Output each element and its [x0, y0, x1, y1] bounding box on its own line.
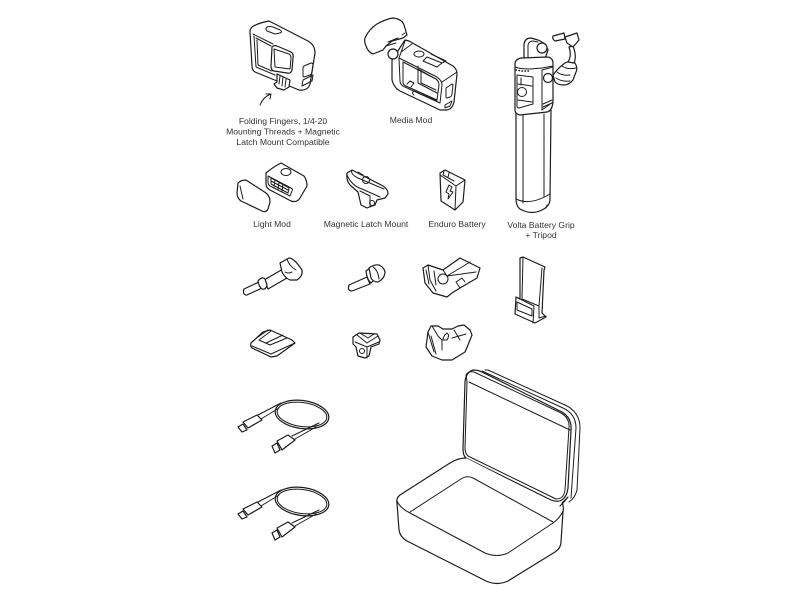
icon: open carrying case	[397, 370, 580, 584]
arrow: points to folding fingers	[260, 94, 271, 105]
label: camera features: Folding Fingers, 1/4-20	[239, 116, 327, 126]
label: camera features: Latch Mount Compatible	[236, 137, 330, 147]
label: magnetic latch mount: Magnetic Latch Mount	[324, 219, 409, 229]
icon: media mod	[365, 18, 457, 110]
icon: swivel buckle	[426, 325, 472, 360]
label: media mod: Media Mod	[390, 115, 432, 125]
icon: adhesive mount	[251, 330, 295, 357]
label: volta battery grip: + Tripod	[525, 230, 557, 240]
icon: usb-c cable 2	[238, 484, 331, 540]
icon: camera	[250, 21, 315, 90]
icon: short thumbscrew	[348, 265, 385, 291]
icon: quick release buckle	[353, 333, 380, 358]
label: camera features	[226, 116, 341, 147]
icon: buckle mount	[423, 258, 480, 297]
label: light mod: Light Mod	[253, 219, 291, 229]
label: volta battery grip: Volta Battery Grip	[507, 220, 575, 230]
icon: long thumbscrew	[243, 258, 302, 295]
icon: volta battery grip	[515, 33, 579, 212]
label: camera features: Mounting Threads + Magnetic	[226, 126, 341, 136]
icon: enduro battery	[440, 170, 465, 210]
icon: magnetic latch mount	[347, 170, 388, 208]
icon: j-hook clip	[515, 257, 546, 323]
label: volta battery grip	[507, 220, 575, 240]
label: enduro battery: Enduro Battery	[428, 219, 486, 229]
icon: light mod	[237, 163, 307, 212]
icon: usb-c cable 1	[238, 397, 331, 453]
